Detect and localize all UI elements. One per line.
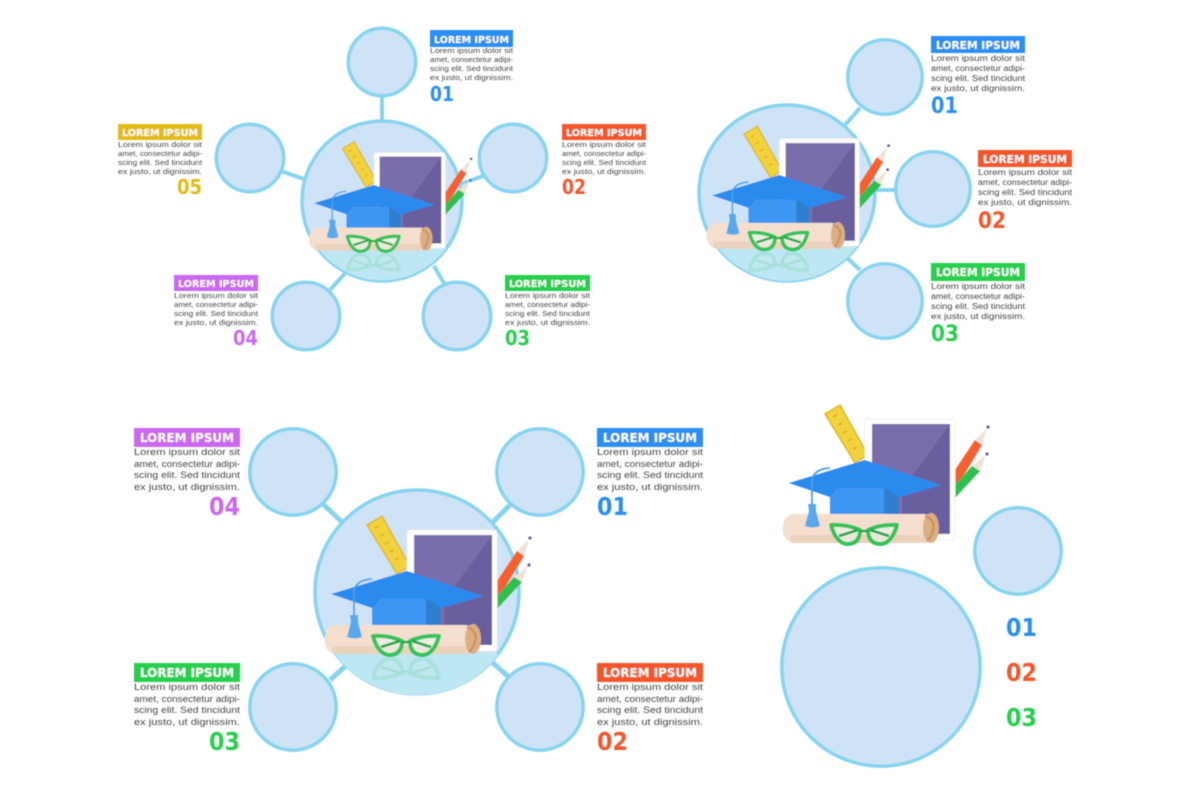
callout 02: ex justo, ut dignissim.: [597, 717, 703, 727]
callout 01: amet, consectetur adipi-: [430, 57, 514, 64]
callout 03: ex justo, ut dignissim.: [134, 717, 240, 727]
illustration: graduation items: [783, 405, 990, 544]
callout 01: ex justo, ut dignissim.: [931, 84, 1025, 93]
callout 04: LOREM IPSUM: [178, 279, 254, 290]
callout 03: Lorem ipsum dolor sit: [931, 282, 1026, 291]
callout 02: LOREM IPSUM: [603, 666, 697, 680]
callout 01: scing elit. Sed tincidunt: [597, 470, 704, 480]
callout 02: amet, consectetur adipi-: [597, 694, 703, 704]
illustration: graduation items: [325, 516, 532, 655]
reflection of glasses: [373, 659, 439, 678]
illustration: graduation items: [309, 142, 472, 251]
callout 02: [597, 663, 704, 756]
illustration: graduation items: [707, 126, 890, 250]
callout 03: amet, consectetur adipi-: [134, 694, 240, 704]
callout 01: Lorem ipsum dolor sit: [430, 48, 513, 55]
callout 05: [118, 124, 203, 199]
reflection of glasses: [749, 253, 808, 270]
connector lines: [845, 108, 895, 270]
callout 03: 03: [209, 727, 240, 756]
callout 01: ex justo, ut dignissim.: [597, 482, 703, 492]
callout 04: Lorem ipsum dolor sit: [174, 293, 258, 300]
small circle: [975, 508, 1061, 594]
large circle: [782, 568, 980, 766]
callout 04: amet, consectetur adipi-: [174, 302, 259, 309]
callout 02: 02: [562, 175, 586, 199]
callout 05: ex justo, ut dignissim.: [118, 169, 202, 176]
panel: three-option diagram: [699, 36, 1073, 347]
callout 02: LOREM IPSUM: [983, 153, 1067, 166]
callout 02: scing elit. Sed tincidunt: [562, 160, 646, 167]
callout 01: LOREM IPSUM: [936, 39, 1020, 52]
callout 03: scing elit. Sed tincidunt: [931, 302, 1026, 311]
callout 03: Lorem ipsum dolor sit: [505, 293, 590, 300]
callout 02: amet, consectetur adipi-: [978, 178, 1072, 187]
panel: five-option diagram: [118, 28, 647, 350]
callout 01: Lorem ipsum dolor sit: [931, 54, 1026, 63]
callout 02: Lorem ipsum dolor sit: [978, 168, 1073, 177]
callout 03: scing elit. Sed tincidunt: [134, 705, 241, 715]
callout 03: amet, consectetur adipi-: [505, 302, 591, 309]
callout 01: [430, 30, 514, 106]
callout 01: [931, 36, 1026, 119]
callout 03: [505, 275, 591, 350]
callout 01: [597, 428, 704, 521]
callout 04: [174, 275, 259, 350]
callout 01: amet, consectetur adipi-: [931, 64, 1025, 73]
reflection of glasses: [347, 255, 399, 270]
central circle: [699, 105, 875, 281]
callout 01: scing elit. Sed tincidunt: [430, 66, 513, 73]
callout 02: [562, 124, 647, 199]
callout 02: 02: [978, 209, 1006, 234]
panel: four-option diagram: [134, 428, 704, 756]
callout 03: 03: [505, 326, 530, 350]
callout 02: scing elit. Sed tincidunt: [978, 188, 1073, 197]
callout 04: scing elit. Sed tincidunt: [174, 311, 258, 318]
callout 02: LOREM IPSUM: [566, 128, 642, 139]
callout 03: LOREM IPSUM: [140, 666, 234, 680]
central circle: [315, 490, 519, 695]
callout 02: 02: [597, 727, 628, 756]
callout 02: ex justo, ut dignissim.: [562, 169, 646, 176]
connector lines: [281, 97, 483, 290]
callout 01: 01: [597, 492, 628, 521]
callout 05: LOREM IPSUM: [122, 128, 198, 139]
callout 01: ex justo, ut dignissim.: [430, 75, 513, 82]
callout 01: Lorem ipsum dolor sit: [597, 447, 704, 457]
callout 04: ex justo, ut dignissim.: [134, 482, 240, 492]
central circle: [302, 121, 462, 281]
number 01: 01: [1006, 613, 1037, 642]
panel: element kit: [782, 405, 1061, 766]
callout 01: scing elit. Sed tincidunt: [931, 74, 1026, 83]
callout 03: amet, consectetur adipi-: [931, 292, 1025, 301]
callout 02: ex justo, ut dignissim.: [978, 198, 1072, 207]
callout 01: LOREM IPSUM: [434, 35, 509, 46]
callout 03: [134, 663, 241, 756]
callout 02: Lorem ipsum dolor sit: [597, 682, 704, 692]
infographic set: [118, 28, 1073, 766]
callout 02: Lorem ipsum dolor sit: [562, 142, 646, 149]
number 02: 02: [1006, 658, 1037, 687]
callout 04: Lorem ipsum dolor sit: [134, 447, 241, 457]
callout 03: Lorem ipsum dolor sit: [134, 682, 241, 692]
callout 04: scing elit. Sed tincidunt: [134, 470, 241, 480]
callout 01: 01: [931, 94, 958, 119]
callout 03: scing elit. Sed tincidunt: [505, 311, 590, 318]
callout 04: LOREM IPSUM: [140, 431, 234, 445]
option circles: [216, 28, 547, 350]
callout 03: LOREM IPSUM: [936, 266, 1020, 279]
callout 02: scing elit. Sed tincidunt: [597, 705, 704, 715]
callout 04: amet, consectetur adipi-: [134, 459, 240, 469]
callout 02: amet, consectetur adipi-: [562, 151, 647, 158]
callout 03: [931, 263, 1026, 347]
callout 01: amet, consectetur adipi-: [597, 459, 703, 469]
callout 01: LOREM IPSUM: [603, 431, 697, 445]
callout 05: Lorem ipsum dolor sit: [118, 142, 202, 149]
option circles: [848, 40, 970, 338]
callout 04: 04: [209, 492, 240, 521]
callout 05: 05: [177, 175, 202, 199]
number 03: 03: [1006, 703, 1037, 732]
connector lines: [322, 503, 512, 680]
callout 04: ex justo, ut dignissim.: [174, 320, 258, 327]
callout 03: ex justo, ut dignissim.: [505, 320, 590, 327]
callout 05: amet, consectetur adipi-: [118, 151, 203, 158]
callout 03: ex justo, ut dignissim.: [931, 312, 1025, 321]
callout 04: [134, 428, 241, 521]
callout 03: 03: [931, 322, 959, 347]
callout 03: LOREM IPSUM: [509, 279, 586, 290]
callout 02: [978, 150, 1073, 234]
callout 01: 01: [430, 82, 454, 106]
callout 04: 04: [233, 326, 258, 350]
option circles: [250, 429, 583, 750]
callout 05: scing elit. Sed tincidunt: [118, 160, 202, 167]
